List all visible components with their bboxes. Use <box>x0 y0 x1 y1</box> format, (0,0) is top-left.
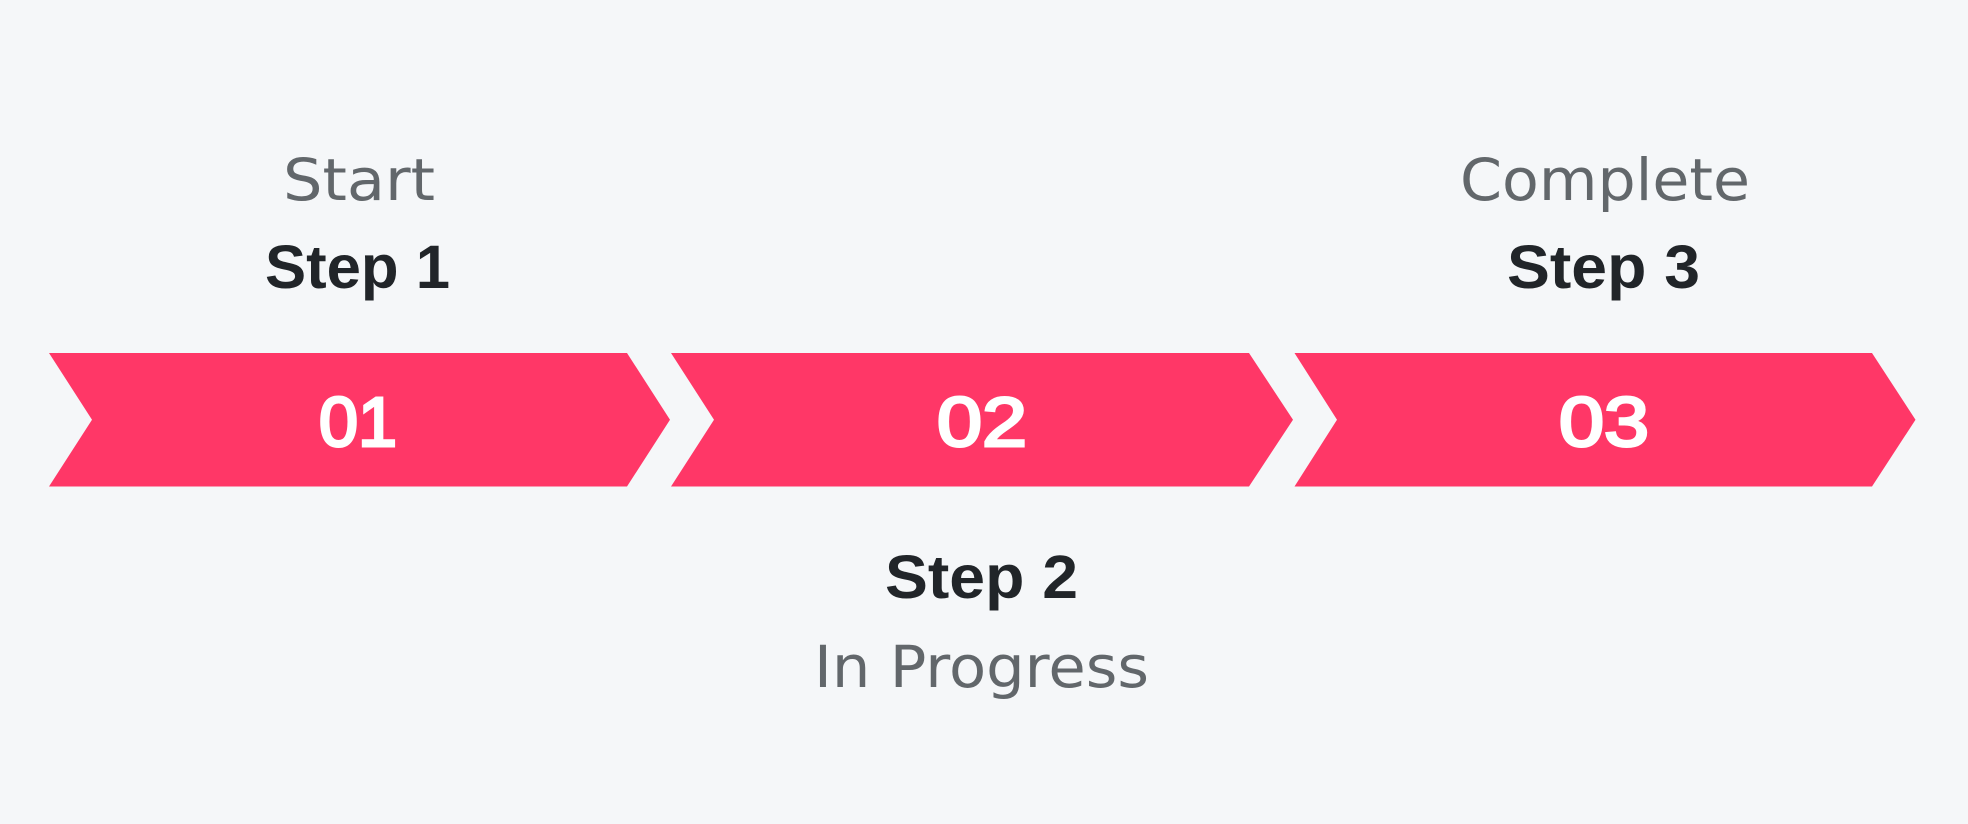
step 1 group <box>49 146 670 486</box>
chevron arrow 2 <box>671 353 1293 486</box>
step 2 group <box>671 353 1293 701</box>
label: Start: Start <box>283 146 435 214</box>
chevron arrow 1 <box>49 353 670 486</box>
number 01: 01 <box>319 383 397 461</box>
label: In Progress: In Progress <box>814 633 1149 701</box>
chevron arrow 3 <box>1294 353 1916 486</box>
heading: Step 1: Step 1 <box>265 233 450 301</box>
heading: Step 2: Step 2 <box>885 543 1078 611</box>
number 03: 03 <box>1559 383 1649 461</box>
label: Complete: Complete <box>1460 146 1750 214</box>
heading: Step 3: Step 3 <box>1507 233 1700 301</box>
step 3 group <box>1294 146 1916 486</box>
number 02: 02 <box>937 383 1027 461</box>
